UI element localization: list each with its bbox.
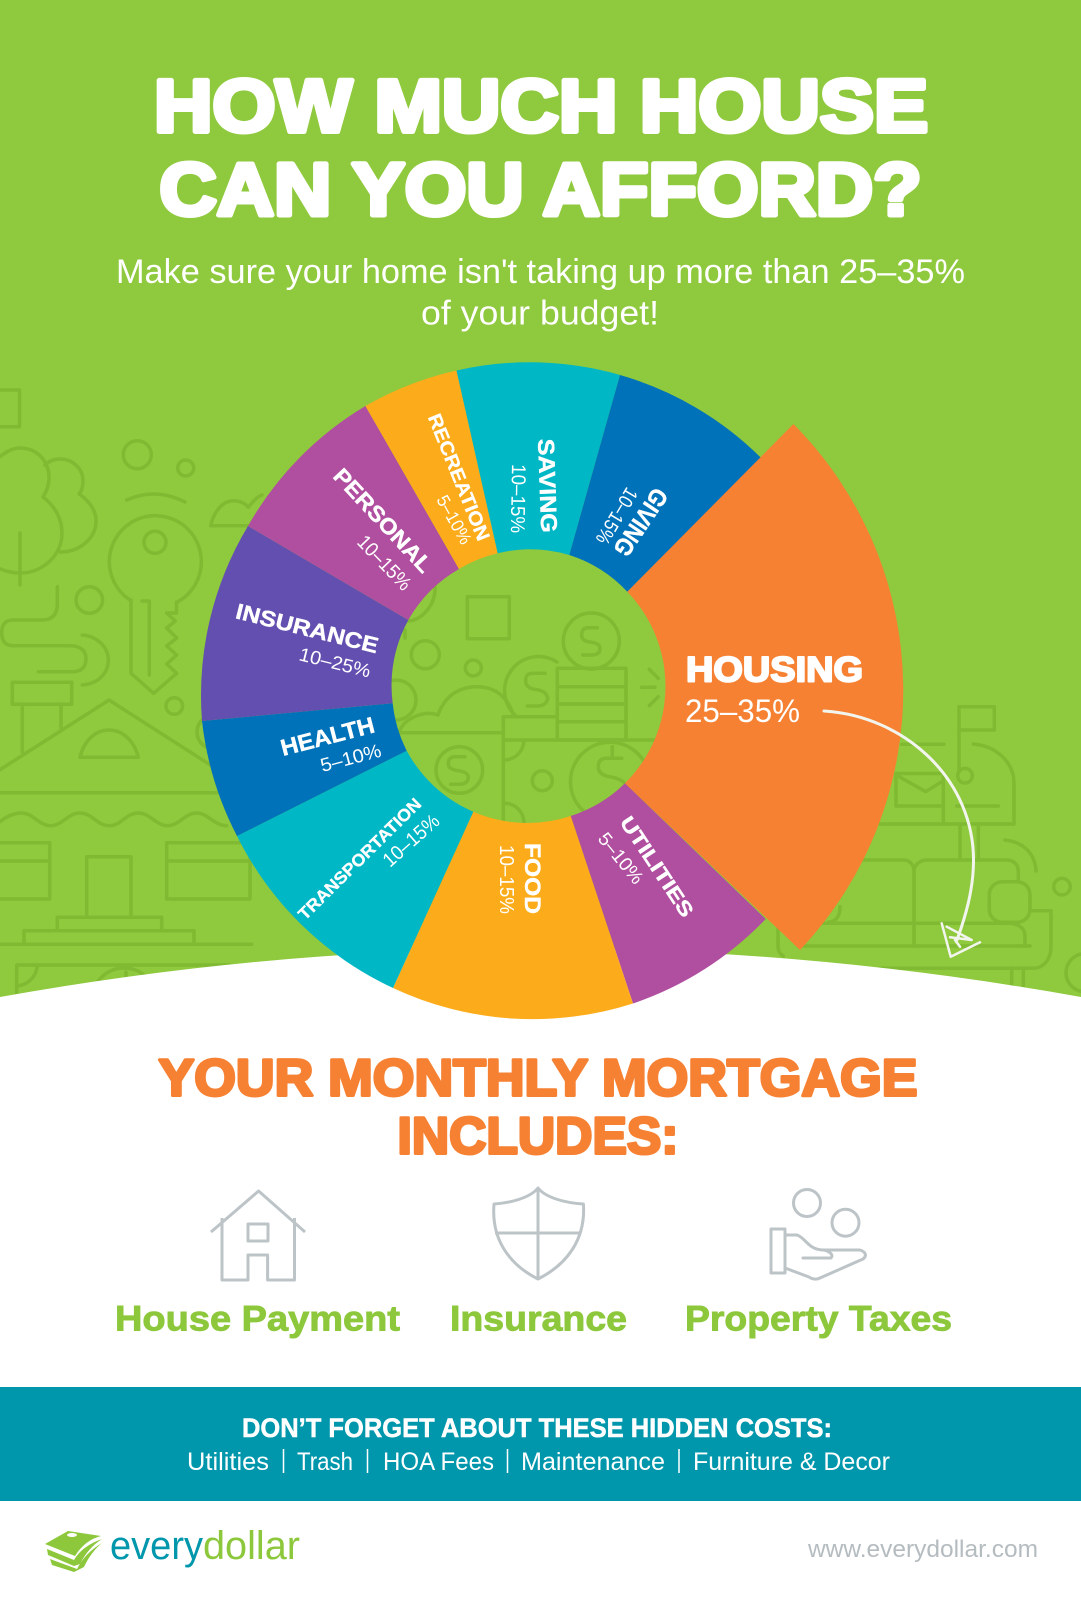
green header background bbox=[0, 0, 1081, 1010]
item: property taxes: Property Taxes bbox=[685, 1298, 952, 1338]
segment: saving: 10–15% bbox=[506, 464, 529, 533]
segment: recreation: RECREATION bbox=[423, 411, 493, 544]
subtitle bbox=[116, 253, 965, 332]
band heading: DON’T FORGET ABOUT THESE HIDDEN COSTS: bbox=[242, 1413, 832, 1443]
segment: food: 10–15% bbox=[495, 845, 517, 914]
logo: everydollar: dollar bbox=[203, 1524, 300, 1568]
logo: everydollar bbox=[45, 1524, 300, 1572]
hidden cost list: Utilities bbox=[187, 1448, 269, 1476]
segment: food bbox=[393, 812, 633, 1019]
segment: insurance: 10–25% bbox=[297, 644, 373, 683]
segment: recreation: 5–10% bbox=[433, 492, 476, 548]
hidden cost list: HOA Fees bbox=[383, 1448, 494, 1476]
segment: saving bbox=[456, 362, 620, 555]
icon: hand with coins bbox=[771, 1190, 865, 1279]
segment: personal: 10–15% bbox=[352, 531, 416, 596]
item: house payment: House Payment bbox=[115, 1298, 400, 1338]
hidden cost list bbox=[187, 1448, 890, 1476]
segment: health bbox=[202, 703, 407, 836]
segment: saving: SAVING bbox=[533, 438, 562, 533]
hidden cost list: Trash bbox=[297, 1448, 353, 1476]
segment: utilities: UTILITIES bbox=[615, 813, 697, 922]
segment: insurance: INSURANCE bbox=[233, 599, 381, 658]
segment: insurance bbox=[201, 526, 408, 721]
segment: giving: GIVING bbox=[608, 483, 673, 561]
segment: giving: 10–15% bbox=[591, 483, 642, 548]
segment: food: FOOD bbox=[520, 843, 545, 914]
title bbox=[154, 64, 928, 231]
heading: your monthly mortgage includes: INCLUDES: bbox=[398, 1106, 678, 1164]
segment: housing (highlighted) bbox=[625, 424, 903, 950]
segment: personal bbox=[248, 406, 459, 620]
background line art: house, key, money, mailbox and sofa bbox=[0, 390, 1081, 1032]
segment: health: 5–10% bbox=[318, 741, 384, 777]
title: HOW MUCH HOUSE bbox=[154, 64, 928, 148]
segment: utilities bbox=[571, 783, 766, 1004]
icon: house bbox=[211, 1191, 305, 1280]
segment: recreation bbox=[365, 370, 498, 569]
panel: hidden costs band bbox=[0, 1387, 1081, 1501]
segment: personal: PERSONAL bbox=[328, 463, 437, 578]
item: house payment bbox=[115, 1191, 400, 1338]
website url: www.everydollar.com bbox=[807, 1536, 1038, 1563]
subtitle: Make sure your home isn't taking up more than 25–35% bbox=[116, 253, 965, 291]
segment: transportation: TRANSPORTATION bbox=[294, 794, 425, 924]
white lower section with curved top bbox=[0, 948, 1081, 1600]
segment: transportation: 10–15% bbox=[379, 810, 444, 872]
segment: health: HEALTH bbox=[278, 712, 377, 761]
item: insurance bbox=[450, 1188, 627, 1338]
segment: transportation bbox=[237, 751, 473, 988]
icon: stack of bills bbox=[45, 1531, 102, 1572]
title: CAN YOU AFFORD? bbox=[160, 148, 922, 231]
icon: shield bbox=[494, 1188, 584, 1279]
segment: giving bbox=[569, 375, 762, 592]
item: property taxes bbox=[685, 1190, 952, 1338]
logo: everydollar: every bbox=[110, 1524, 203, 1568]
donut chart: budget categories bbox=[201, 362, 903, 1019]
arrow from housing to house line art bbox=[824, 711, 980, 957]
heading: your monthly mortgage includes: YOUR MONTHLY MORTGAGE bbox=[158, 1048, 918, 1106]
segment: housing (highlighted): HOUSING bbox=[686, 650, 863, 690]
subtitle: of your budget! bbox=[421, 294, 659, 332]
segment: housing (highlighted): 25–35% bbox=[685, 693, 800, 729]
item: insurance: Insurance bbox=[450, 1298, 627, 1338]
segment: utilities: 5–10% bbox=[593, 829, 647, 889]
hidden cost list: Furniture & Decor bbox=[693, 1448, 890, 1476]
heading: your monthly mortgage includes bbox=[158, 1048, 918, 1164]
hidden cost list: Maintenance bbox=[521, 1448, 665, 1476]
